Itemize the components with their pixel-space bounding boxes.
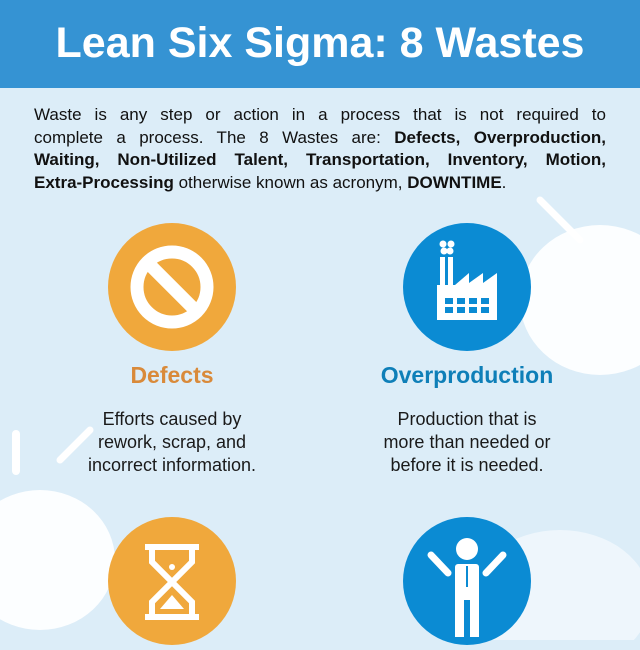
text: defects: rework, scrap, and: [98, 432, 246, 452]
heading: overproduction: Overproduction: [381, 362, 553, 388]
text: defects: incorrect information.: [88, 455, 256, 475]
icon: hourglass: [108, 517, 236, 645]
text: overproduction: more than needed or: [383, 432, 551, 452]
title: Lean Six Sigma: 8 Wastes: [56, 19, 584, 67]
icon: defects: [108, 223, 236, 351]
text: overproduction: [383, 409, 551, 475]
intro text: Extra-Processing otherwise known as acronym, DOWNTIME.: [34, 173, 506, 192]
text: overproduction: before it is needed.: [390, 455, 544, 475]
header: [0, 0, 640, 88]
text: defects: Efforts caused by: [103, 409, 241, 429]
icon: person: [403, 517, 531, 645]
heading: defects: Defects: [130, 362, 214, 388]
text: overproduction: Production that is: [397, 409, 537, 429]
icon: factory: [403, 223, 531, 351]
intro text: complete a process. The 8 Wastes are: Defects, Overproduction,: [34, 128, 606, 147]
intro text: Waiting, Non-Utilized Talent, Transportation, Inventory, Motion,: [34, 150, 606, 169]
intro text: Waste is any step or action in a process that is not required to: [34, 105, 606, 124]
intro text: [34, 105, 606, 192]
text: defects: [88, 409, 256, 475]
